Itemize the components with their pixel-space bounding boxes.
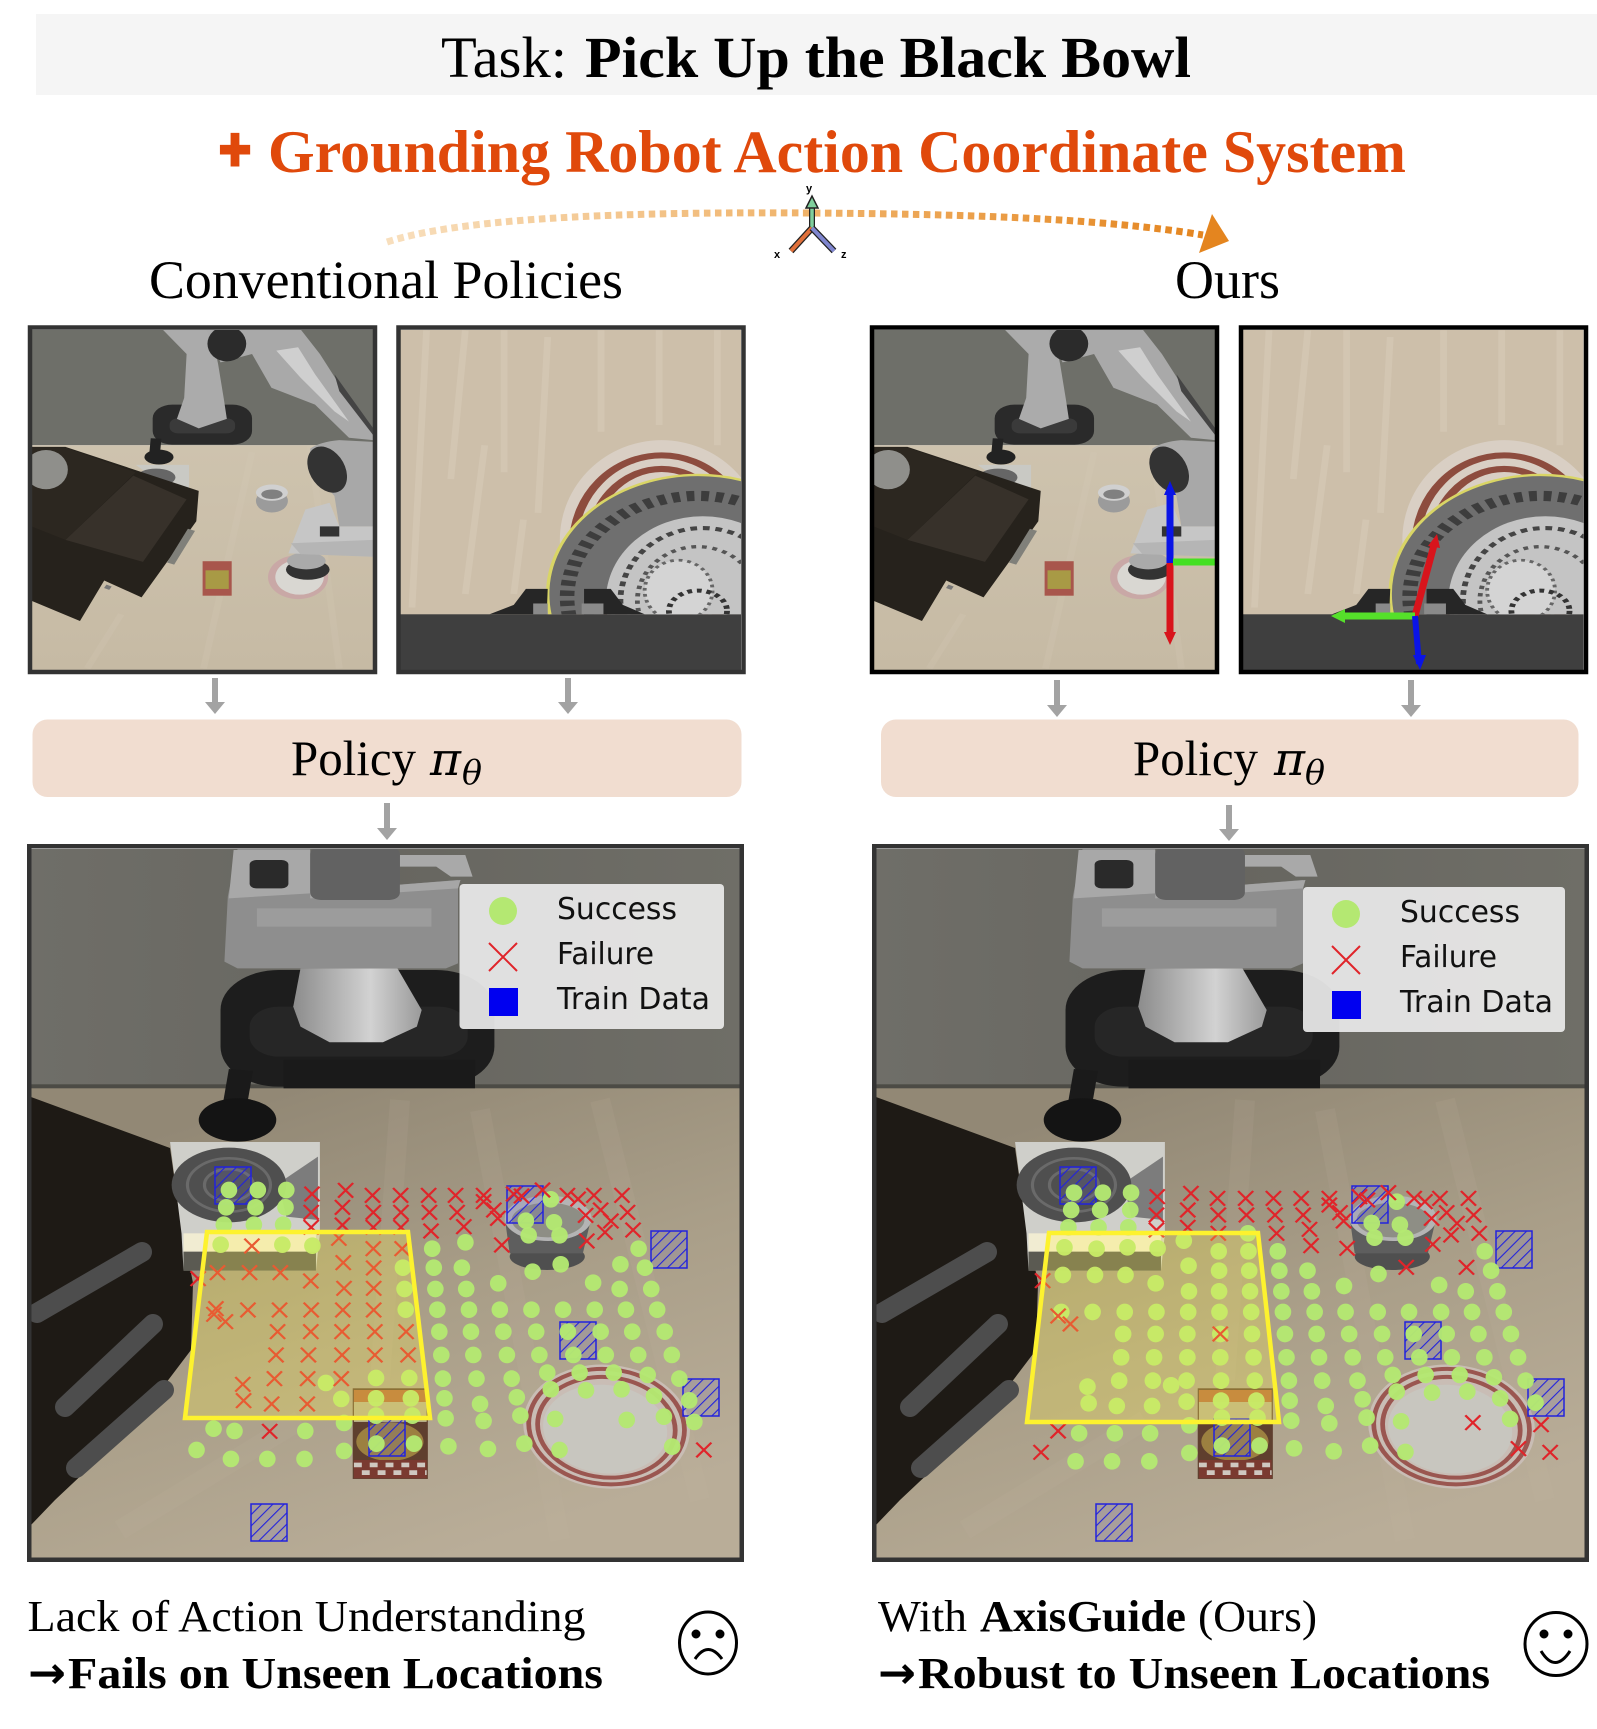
arrow: policy to result (conventional) [377, 803, 397, 840]
caption: ours outcome: (Ours) [1198, 1592, 1317, 1641]
subtitle: grounding robot action coordinate system: + [219, 116, 251, 183]
caption: ours outcome: → [878, 1648, 916, 1699]
legend: ours: Train Data [1399, 985, 1553, 1020]
subtitle: grounding robot action coordinate system: Grounding Robot Action Coordinate System [268, 119, 1406, 185]
caption: ours outcome: Robust to Unseen Locations [918, 1649, 1490, 1698]
chart: ours success and failure markers [1034, 1184, 1558, 1470]
policy box: conventional: θ [462, 753, 482, 793]
arrow: view 1 to policy (conventional) [205, 678, 225, 714]
policy box: ours: θ [1305, 753, 1325, 793]
arrow: view 2 to policy (conventional) [558, 678, 578, 714]
caption: conventional outcome [28, 1592, 603, 1699]
legend: conventional: Success [557, 892, 677, 927]
legend: ours: Failure [1400, 940, 1497, 975]
legend: conventional: Train Data [556, 982, 710, 1017]
highlighted region: yellow trapezoid [1027, 1233, 1279, 1422]
caption: conventional outcome: Lack of Action Understanding [28, 1592, 586, 1641]
caption: conventional outcome: → [28, 1648, 66, 1699]
icon: xyz coordinate axes: z [841, 249, 847, 261]
panel: ours view 2 wrist camera with axes [1240, 327, 1597, 713]
icon: blue red green wrist axes [1331, 534, 1440, 670]
arrow: view 2 to policy (ours) [1401, 680, 1421, 717]
icon: blue red green gripper axes [1164, 481, 1215, 645]
icon: sad face [680, 1612, 736, 1674]
policy box: conventional: π [429, 732, 462, 786]
chart: conventional success and failure markers [188, 1182, 711, 1467]
policy box: conventional [32, 720, 742, 797]
legend: ours: Success [1400, 895, 1520, 930]
arrow: dotted arc from conventional to ours [387, 213, 1229, 253]
caption: ours outcome: With [878, 1592, 967, 1641]
caption: ours outcome [878, 1592, 1490, 1699]
highlighted region: yellow trapezoid [185, 1232, 430, 1418]
icon: xyz coordinate axes [774, 183, 847, 261]
arrow: policy to result (ours) [1219, 805, 1239, 841]
caption: ours outcome: AxisGuide [980, 1592, 1186, 1641]
task banner: Task: [441, 25, 567, 90]
heading: conventional policies: Conventional Policies [149, 250, 623, 310]
legend: conventional [460, 884, 724, 1029]
icon: happy face [1525, 1612, 1587, 1676]
panel: conventional view 1 robot scene [24, 326, 378, 672]
heading: ours: Ours [1175, 250, 1280, 310]
icon: xyz coordinate axes: y [806, 183, 813, 195]
task banner: Pick Up the Black Bowl [585, 25, 1191, 90]
caption: conventional outcome: Fails on Unseen Locations [68, 1649, 603, 1698]
legend: ours [1303, 887, 1565, 1032]
policy box: ours [881, 720, 1578, 797]
policy box: ours: π [1273, 732, 1306, 786]
panel: conventional result scatter [29, 846, 742, 1560]
arrow: view 1 to policy (ours) [1047, 680, 1067, 717]
panel: ours view 1 robot scene with axes [866, 326, 1220, 672]
panel: ours result scatter [874, 846, 1587, 1560]
panel: conventional view 2 wrist camera [397, 327, 848, 713]
legend: conventional: Failure [557, 937, 654, 972]
task banner [36, 14, 1597, 95]
policy box: ours: Policy [1133, 730, 1258, 786]
icon: xyz coordinate axes: x [774, 249, 781, 261]
policy box: conventional: Policy [291, 730, 416, 786]
